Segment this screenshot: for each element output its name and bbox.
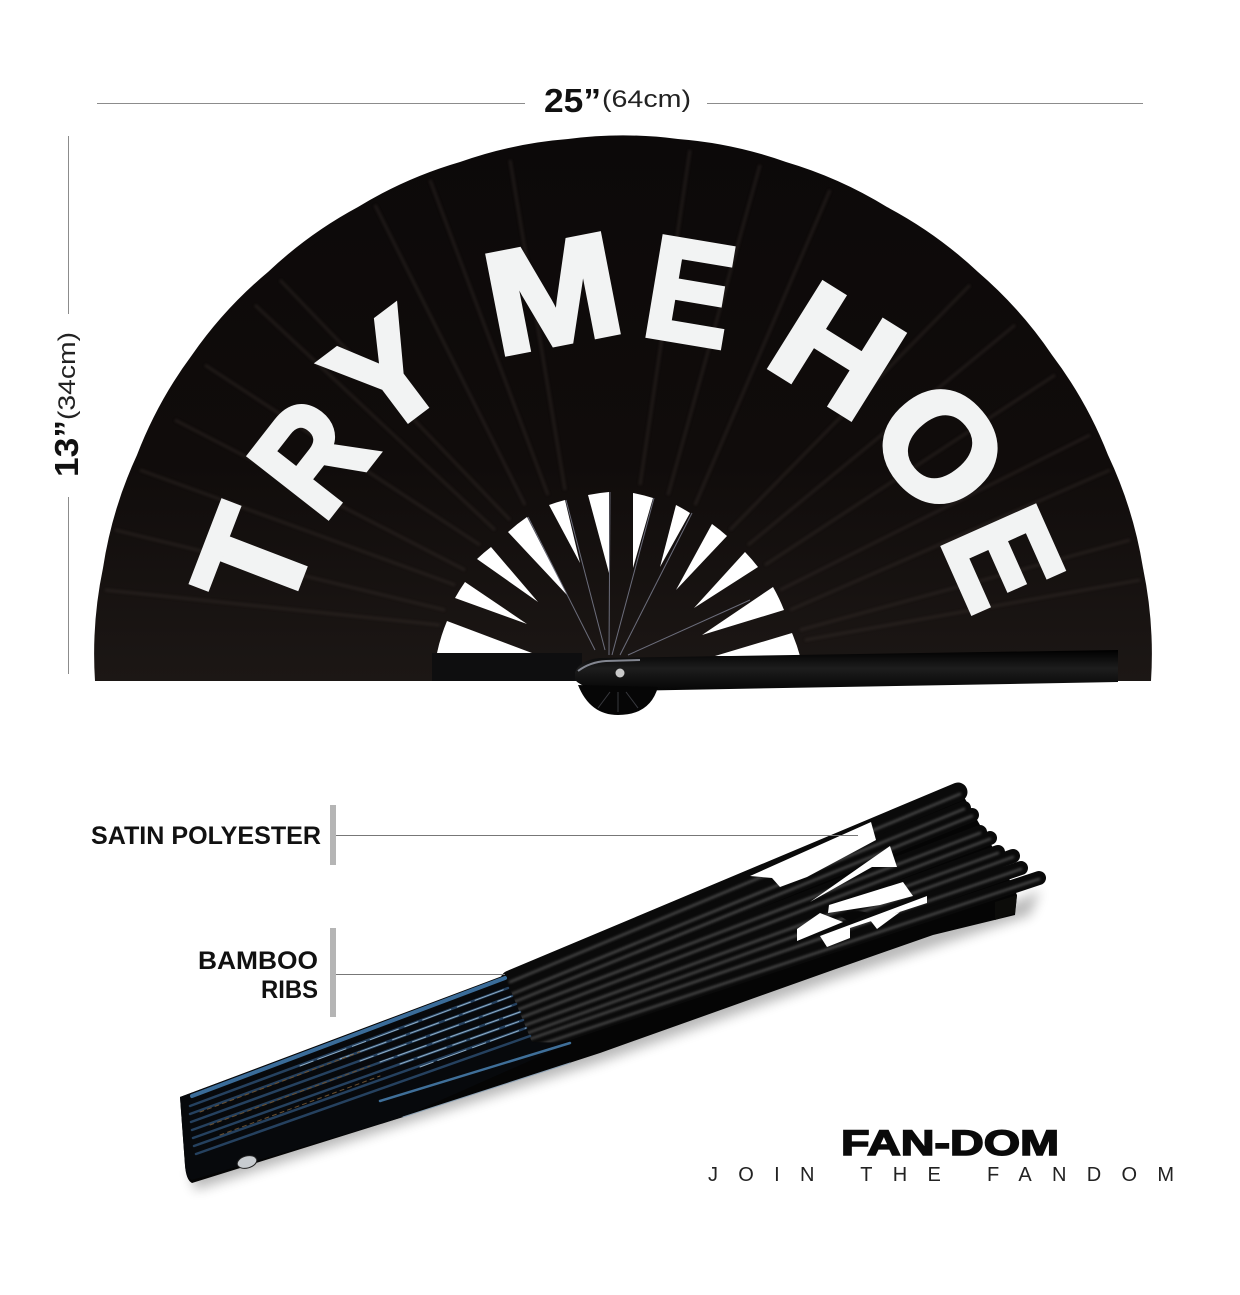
slogan on fan: T: [162, 489, 345, 631]
closed fan: [180, 790, 1040, 1190]
satin dark mask: [840, 911, 868, 922]
slogan on fan: E: [912, 486, 1095, 630]
handle: [180, 977, 570, 1180]
open fan: [94, 135, 1152, 715]
folded ribs: [510, 792, 1039, 1046]
guard stick: [575, 650, 1118, 691]
width dimension: 25 inches: 25”: [544, 82, 601, 119]
height dimension: 13 inches: [48, 136, 85, 674]
lower left guard bar: [432, 653, 582, 681]
height dimension: 13 inches: (34cm): [54, 332, 81, 420]
handle rivet: [236, 1154, 258, 1170]
slogan on fan: Y: [299, 280, 476, 469]
handle blue ribs: [190, 978, 570, 1154]
fabric fold streaks: [105, 150, 1140, 640]
slogan on fan: M: [472, 203, 634, 386]
satin fragments: [750, 822, 927, 947]
slogan on fan: R: [219, 370, 404, 543]
rivet: [616, 668, 624, 678]
brand logo: [708, 1124, 1174, 1186]
brand logo: JOIN THE FANDOM: [708, 1164, 1174, 1186]
width dimension: 25 inches: (64cm): [602, 86, 691, 113]
height dimension: 13 inches: 13”: [48, 420, 85, 477]
rib highlights: [528, 492, 750, 655]
drop shadow: [190, 890, 1040, 1190]
fan fabric with scalloped edge: [94, 135, 1152, 681]
slogan on fan: [162, 203, 1095, 631]
white gaps between the ribs: [437, 492, 800, 656]
closed fan body: [180, 790, 1017, 1183]
rib gloss: [510, 794, 1039, 1048]
slogan on fan: O: [839, 348, 1042, 546]
slogan on fan: E: [635, 204, 746, 378]
slogan on fan: H: [745, 252, 929, 450]
guard stick end: [995, 895, 1017, 920]
label: bamboo ribs: RIBS: [261, 976, 318, 1004]
label: satin polyester: [91, 805, 858, 865]
width dimension: 25 inches: [97, 82, 1143, 119]
label: bamboo ribs: BAMBOO: [198, 947, 318, 975]
hub: [578, 685, 658, 715]
label: satin polyester: SATIN POLYESTER: [91, 822, 321, 850]
hub texture: [598, 692, 638, 712]
brand logo: FAN-DOM: [841, 1124, 1059, 1163]
hub shine: [578, 660, 640, 671]
label: bamboo ribs: [198, 928, 505, 1017]
